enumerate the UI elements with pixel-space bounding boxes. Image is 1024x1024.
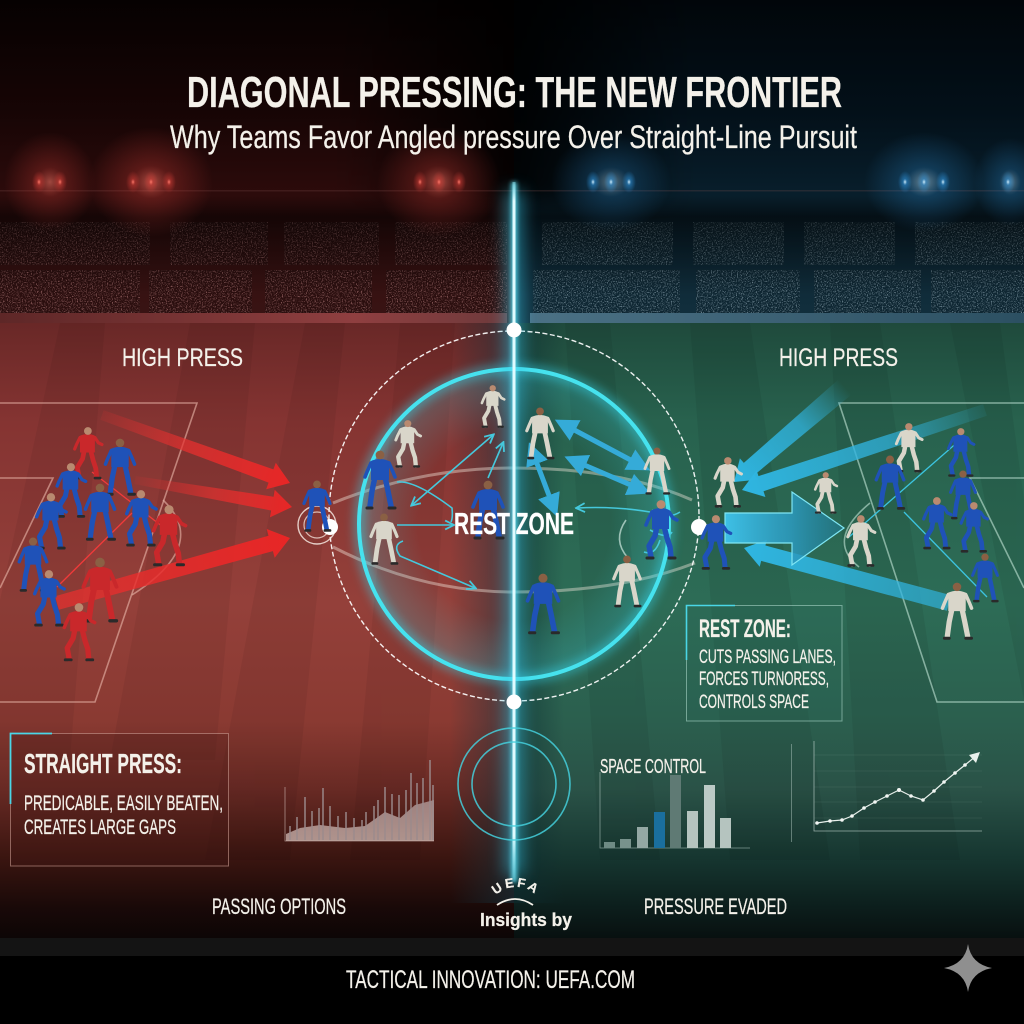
central axis light beam	[505, 182, 523, 882]
panel: rest zone callout: REST ZONE:	[699, 615, 791, 643]
logo: UEFA Insights by: UEFA	[491, 878, 537, 894]
panel: rest zone callout	[686, 606, 842, 721]
panel: straight press callout	[10, 734, 228, 866]
footer band	[0, 938, 1024, 1024]
logo: UEFA Insights by: Insights by	[480, 910, 572, 930]
stand crowd: blue side	[0, 195, 1024, 313]
line chart: pressure evaded	[814, 741, 982, 831]
panel: rest zone callout: FORCES TURNORESS,	[699, 669, 829, 690]
passing lanes: thin lines in penalty areas	[57, 440, 987, 597]
label: high press right: HIGH PRESS	[779, 344, 898, 372]
label: rest zone: REST ZONE	[454, 506, 574, 541]
players: rest zone	[304, 385, 741, 633]
decorative target rings: centre	[458, 728, 570, 840]
panel: straight press callout: CREATES LARGE GAPS	[24, 816, 176, 839]
blue diagonal arrows	[734, 379, 987, 611]
panel: straight press callout: STRAIGHT PRESS:	[24, 748, 182, 779]
thin passing arrows in rest zone	[397, 435, 680, 588]
pitch markings: left penalty area	[0, 403, 197, 702]
left target rings and dots	[298, 506, 707, 544]
stadium floodlights	[0, 127, 1024, 237]
bar chart: space control: SPACE CONTROL	[600, 756, 706, 778]
pitch: green half	[514, 323, 1024, 945]
dashed outer circle	[329, 331, 699, 701]
pitch boards rail	[0, 313, 1024, 323]
panel: rest zone callout: CUTS PASSING LANES,	[699, 647, 836, 668]
pitch: red half	[0, 323, 514, 945]
bar chart: space control	[600, 756, 750, 848]
logo: UEFA Insights by	[480, 878, 572, 930]
rest zone cyan ring	[359, 369, 669, 679]
subtitle: Why Teams Favor Angled pressure Over Straight-Line Pursuit	[170, 119, 857, 155]
panel: straight press callout: PREDICABLE, EASILY BEATEN,	[24, 792, 223, 815]
axis node dots	[506, 322, 522, 710]
rest zone tint	[359, 369, 669, 679]
double-headed arrows in rest zone	[533, 425, 640, 506]
players: left penalty area	[19, 427, 186, 660]
divider	[791, 744, 792, 842]
stand crowd: red side	[0, 222, 507, 313]
footer text: TACTICAL INNOVATION: UEFA.COM	[346, 966, 635, 994]
label: high press left: HIGH PRESS	[122, 344, 243, 372]
icon: sparkle star	[944, 944, 992, 992]
panel: rest zone callout: CONTROLS SPACE	[699, 692, 809, 713]
label: pressure evaded: PRESSURE EVADED	[644, 894, 787, 919]
pitch markings: right penalty area	[839, 403, 1024, 702]
big cyan arrow	[725, 492, 844, 565]
red straight-press arrows	[55, 410, 292, 610]
centre circle perspective arcs	[333, 468, 695, 592]
area chart: passing options	[285, 760, 434, 841]
players: right penalty area	[815, 423, 997, 638]
label: passing options: PASSING OPTIONS	[212, 894, 346, 919]
